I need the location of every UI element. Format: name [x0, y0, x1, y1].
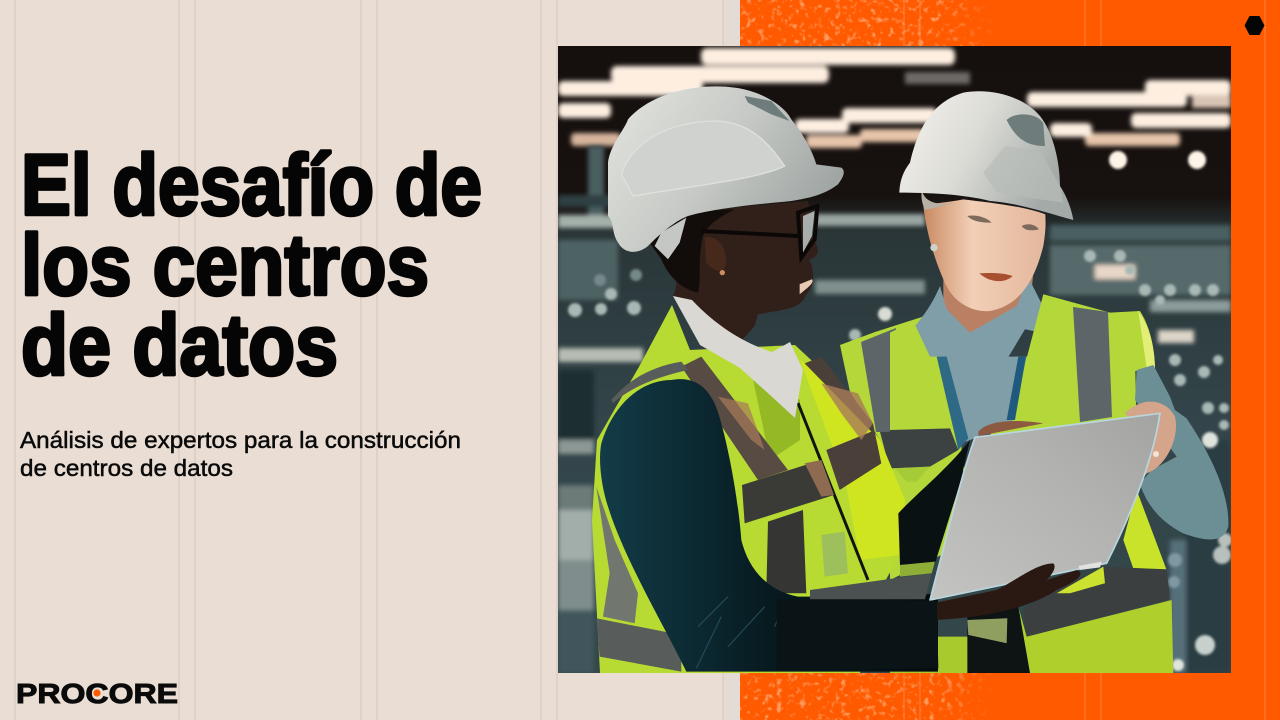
logo: Procore: PROCORE [16, 678, 178, 709]
forearm of left engineer [898, 440, 970, 565]
laptop base [810, 573, 932, 599]
icon: black hexagon [1244, 16, 1264, 35]
neck and collar [943, 274, 1034, 332]
white collar [673, 296, 803, 418]
title [21, 138, 482, 394]
top speckled texture [740, 0, 996, 46]
vest lower [890, 357, 962, 580]
title: de datos [21, 298, 338, 394]
title: El desafío de [21, 138, 482, 234]
reflective strips [681, 357, 788, 480]
left shoulder of right engineer vest [840, 316, 964, 472]
supporting hand and sleeve [933, 563, 1081, 620]
helmet [608, 86, 844, 252]
ceiling lights [558, 48, 1231, 148]
laptop and hands [777, 413, 1160, 670]
subtitle: Análisis de expertos para la construcción [20, 427, 461, 453]
head [673, 201, 818, 340]
hand behind laptop [978, 421, 1043, 436]
subtitle: de centros de datos [20, 455, 233, 481]
laptop screen [930, 413, 1160, 600]
vest body [592, 305, 905, 673]
photo: two engineers with a laptop in a data center [558, 46, 1232, 675]
helmet [899, 91, 1073, 220]
background racks and bokeh [558, 146, 1231, 673]
bottom speckled texture [740, 673, 996, 720]
vest under laptop [1123, 490, 1167, 573]
person: engineer on the left [592, 86, 938, 673]
face [923, 199, 1046, 311]
person: engineer on the right [840, 91, 1228, 675]
right sleeve and hand [1135, 365, 1228, 539]
orange background panel [740, 0, 1280, 720]
vest upper right [1023, 294, 1155, 371]
reflective strip of right engineer vest [1073, 307, 1112, 422]
dark sleeve [600, 379, 938, 672]
glasses [701, 206, 817, 258]
beige background panel [0, 0, 740, 720]
subtitle [20, 427, 461, 481]
title: los centros [21, 218, 429, 314]
